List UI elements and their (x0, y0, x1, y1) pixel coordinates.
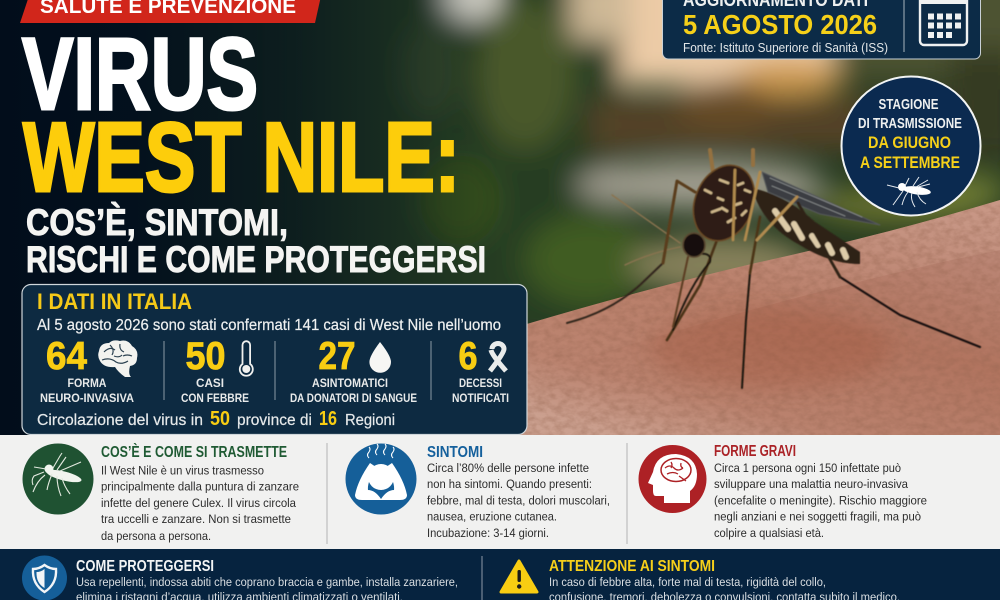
circolazione del virus: Circolazione del virus in (37, 412, 203, 429)
icon: head with brain (638, 445, 706, 513)
icon: calendar (920, 0, 967, 45)
badge: stagione di trasmissione (842, 76, 980, 216)
mosquito on skin (567, 150, 980, 388)
stat: 27 asintomatici (290, 335, 417, 405)
stat: 50 casi con febbre: 50 (186, 335, 226, 378)
stat: 64 forma neuro-invasiva: NEURO-INVASIVA (40, 391, 134, 405)
title: VIRUS (22, 17, 258, 131)
stat: 27 asintomatici: ASINTOMATICI (312, 376, 388, 390)
badge: stagione di trasmissione: A SETTEMBRE (860, 154, 960, 172)
stat: 64 forma neuro-invasiva: 64 (46, 335, 88, 378)
icon: person with headache (346, 444, 416, 514)
icon: shield (22, 556, 67, 600)
panel: forme gravi: (encefalite o meningite). Rischio maggiore (714, 494, 927, 508)
panel: forme gravi: Circa 1 persona ogni 150 infettate può (714, 461, 901, 475)
stat: 50 casi con febbre (181, 335, 253, 405)
panel: aggiornamento dati: 5 AGOSTO 2026 (683, 9, 877, 40)
title: WEST NILE: (23, 102, 460, 212)
panel intro: Al 5 agosto 2026 sono stati confermati 141 casi di West Nile nell’uomo (37, 317, 501, 334)
panel: sintomi: Incubazione: 3-14 giorni. (427, 526, 549, 540)
stat: 27 asintomatici: DA DONATORI DI SANGUE (290, 391, 417, 405)
circolazione del virus (37, 408, 395, 430)
light info band (0, 435, 1000, 550)
panel: come proteggersi (22, 556, 458, 600)
circolazione del virus: province di (237, 412, 312, 429)
icon: brain (98, 340, 137, 377)
stat: 50 casi con febbre: CON FEBBRE (181, 391, 249, 405)
title: COS’È, SINTOMI, (26, 202, 288, 243)
stat: 6 decessi: NOTIFICATI (452, 391, 509, 405)
title (22, 17, 486, 280)
badge: stagione di trasmissione: STAGIONE (878, 96, 938, 113)
panel: cos'è e come si trasmette: tra uccelli e zanzare. Non si trasmette (101, 512, 291, 526)
panel: forme gravi: negli anziani e nei soggetti fragili, ma può (714, 510, 921, 524)
badge: stagione di trasmissione: DA GIUGNO (868, 134, 951, 152)
panel: sintomi (346, 444, 610, 540)
panel: forme gravi (638, 443, 927, 540)
panel: sintomi: non ha sintomi. Quando presenti: (427, 477, 592, 491)
background photo: river landscape at sunset (226, 0, 1000, 435)
panel: aggiornamento dati: Fonte: Istituto Superiore di Sanità (ISS) (683, 41, 888, 55)
icon: ribbon (490, 344, 506, 371)
panel: forme gravi: colpire a qualsiasi età. (714, 526, 824, 540)
stat: 6 decessi (452, 335, 509, 405)
title: RISCHI E COME PROTEGGERSI (26, 239, 486, 280)
panel: cos'è e come si trasmette: COS’È E COME SI TRASMETTE (101, 444, 287, 461)
panel: forme gravi: sviluppare una malattia neuro-invasiva (714, 477, 908, 491)
badge: stagione di trasmissione: DI TRASMISSIONE (858, 115, 962, 132)
panel: cos'è e come si trasmette: principalmente dalla puntura di zanzare (101, 480, 299, 494)
stat: 27 asintomatici: 27 (318, 335, 356, 378)
panel: cos'è e come si trasmette (22, 444, 299, 543)
panel: sintomi: nausea, eruzione cutanea. (427, 510, 557, 524)
icon: small mosquito (887, 177, 931, 207)
circolazione del virus: 16 (319, 408, 337, 430)
icon: warning triangle (501, 561, 537, 592)
panel: sintomi: SINTOMI (427, 444, 483, 461)
skin surface (515, 200, 1000, 436)
abdomen (752, 188, 860, 264)
stat: 6 decessi: 6 (458, 335, 478, 378)
panel: sintomi: Circa l’80% delle persone infette (427, 461, 589, 475)
panel: cos'è e come si trasmette: Il West Nile è un virus trasmesso (101, 464, 264, 478)
stat: 6 decessi: DECESSI (459, 376, 502, 390)
icon: thermometer (240, 341, 253, 376)
circolazione del virus: 50 (210, 408, 230, 430)
panel: come proteggersi: COME PROTEGGERSI (76, 558, 214, 575)
stat: 64 forma neuro-invasiva: FORMA (68, 376, 107, 390)
panel: attenzione ai sintomi: In caso di febbre alta, forte mal di testa, rigidità del collo, (549, 575, 826, 589)
panel: cos'è e come si trasmette: da persona a persona. (101, 529, 211, 543)
panel: aggiornamento dati (662, 0, 980, 59)
icon: blood drop (369, 342, 391, 373)
panel: attenzione ai sintomi (501, 558, 900, 600)
panel: attenzione ai sintomi: ATTENZIONE AI SINTOMI (549, 558, 715, 575)
panel heading: I DATI IN ITALIA (37, 289, 192, 314)
panel: forme gravi: FORME GRAVI (714, 443, 796, 460)
category banner (20, 0, 321, 23)
panel: come proteggersi: Usa repellenti, indossa abiti che coprano braccia e gambe, installa zanzariere, (76, 575, 458, 589)
stat: 64 forma neuro-invasiva (40, 335, 137, 405)
panel: cos'è e come si trasmette: infette del genere Culex. Il virus circola (101, 496, 296, 510)
dark bottom band (0, 549, 1000, 600)
panel: sintomi: febbre, mal di testa, dolori muscolari, (427, 494, 610, 508)
circolazione del virus: Regioni (345, 412, 395, 429)
stat: 50 casi con febbre: CASI (196, 376, 224, 390)
icon: mosquito on green circle (22, 444, 94, 514)
panel: i dati in Italia (22, 284, 527, 434)
